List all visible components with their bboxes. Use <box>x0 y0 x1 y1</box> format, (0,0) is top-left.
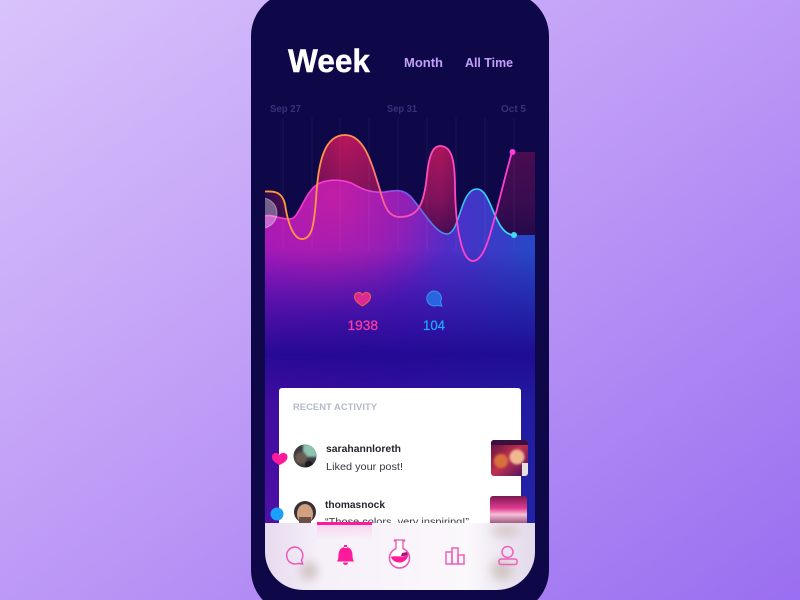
active tab indicator <box>317 522 372 525</box>
bottom navigation <box>265 522 535 590</box>
icon: chat <box>287 547 303 564</box>
heading: RECENT ACTIVITY <box>293 402 378 413</box>
activity row: thomasnock <box>270 496 527 523</box>
line: likes series <box>265 135 512 261</box>
area shading: likes series <box>265 138 535 235</box>
value: 104: 104 <box>423 318 445 333</box>
icon: speech bubble <box>427 291 442 306</box>
area overlay: magenta glow <box>265 181 445 300</box>
indicator glow <box>317 525 372 539</box>
header tabs <box>288 43 513 79</box>
panel: recent activity <box>270 388 528 528</box>
date axis labels: Oct 5 <box>501 103 526 115</box>
scrub handle <box>265 198 278 228</box>
stat: comments <box>423 291 445 333</box>
tab: Month: Month <box>404 55 443 70</box>
username: thomasnock <box>325 499 385 511</box>
message: Liked your post! <box>326 461 403 473</box>
phone body <box>251 0 549 600</box>
tab: All Time: All Time <box>465 55 513 70</box>
icon: bell <box>337 545 354 565</box>
area: comments series <box>265 180 535 525</box>
thumbnail <box>490 496 527 523</box>
date axis labels: Sep 31 <box>387 103 417 115</box>
icon: bubble badge <box>270 508 284 520</box>
icon: bar chart <box>446 548 464 564</box>
date axis labels <box>270 103 526 115</box>
end dot: comments <box>511 232 517 238</box>
stat: likes <box>348 293 378 333</box>
icon: user <box>499 546 517 564</box>
icon: flask <box>390 540 410 568</box>
title: Week: Week <box>288 43 370 79</box>
end dot: likes <box>510 149 516 155</box>
message: “Those colors, very inspiring!” <box>325 516 470 528</box>
grid lines <box>283 118 514 250</box>
area: likes series <box>265 136 535 235</box>
blurred reflections <box>300 526 519 581</box>
avatar <box>294 444 316 468</box>
card <box>279 388 521 528</box>
activity row: sarahannloreth <box>272 440 528 476</box>
wave chart <box>247 118 535 525</box>
line: comments series <box>265 180 514 235</box>
nav panel <box>265 523 535 590</box>
avatar <box>294 501 316 524</box>
thumbnail <box>491 440 528 476</box>
icon: heart <box>354 293 370 306</box>
icon: heart badge <box>272 453 288 465</box>
value: 1938: 1938 <box>348 318 378 333</box>
area overlay: deep indigo <box>265 250 535 525</box>
username: sarahannloreth <box>326 443 401 455</box>
date axis labels: Sep 27 <box>270 103 301 115</box>
